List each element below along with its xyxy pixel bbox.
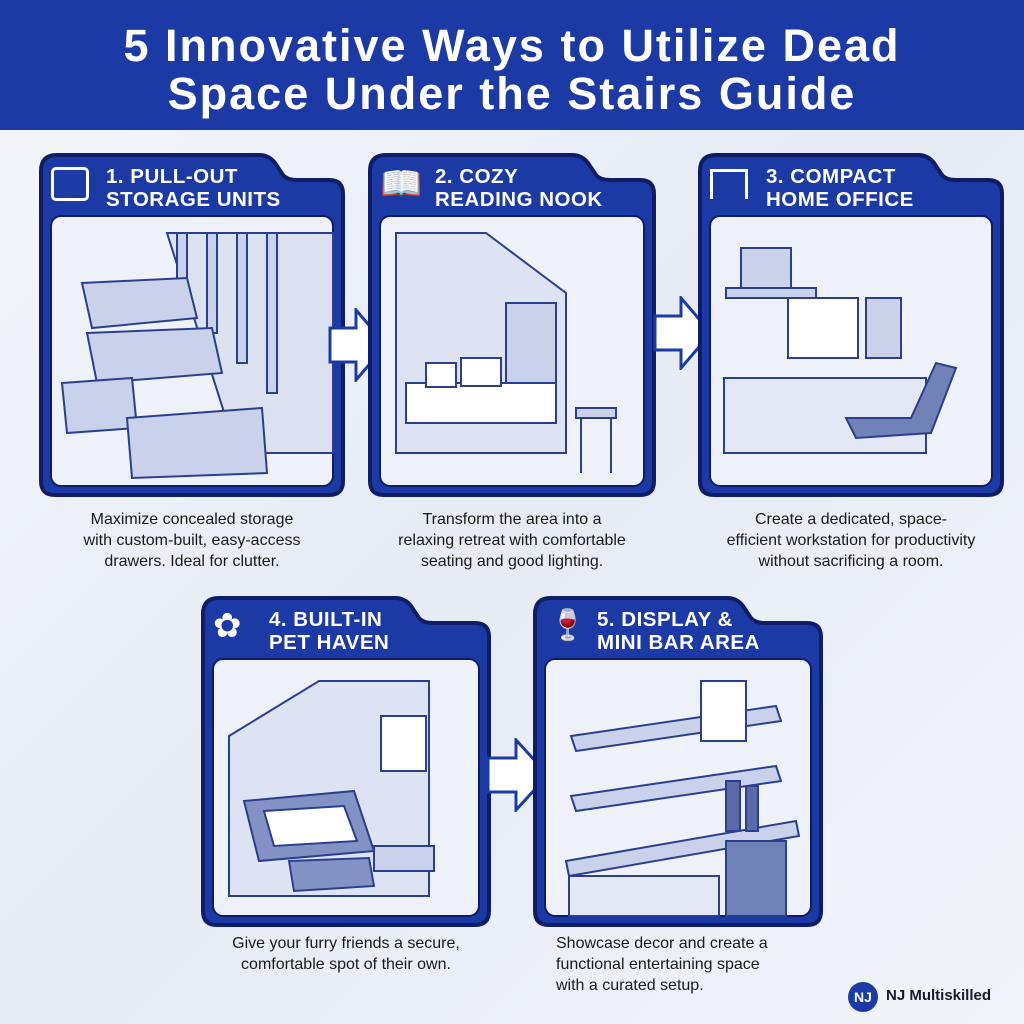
icon: bottle: 🍷: [549, 609, 586, 642]
panel: pet haven: [201, 596, 491, 927]
heading: [269, 608, 389, 654]
caption 1: with custom-built, easy-access: [84, 532, 300, 549]
title: 5 Innovative Ways to Utilize Dead: [123, 20, 900, 71]
arrow 3: [487, 738, 533, 812]
heading: HOME OFFICE: [766, 188, 914, 211]
caption 5: Showcase decor and create a: [556, 935, 768, 952]
caption 3: Create a dedicated, space-: [755, 511, 947, 528]
logo: NJ: [854, 989, 872, 1005]
heading: [106, 165, 281, 211]
arrow 1: [328, 308, 368, 382]
logo: NJ Multiskilled: [886, 987, 991, 1004]
panel: home office: [698, 153, 1004, 497]
panel: pull-out storage: [39, 153, 345, 497]
heading: 3. COMPACT: [766, 165, 896, 188]
caption 1: drawers. Ideal for clutter.: [104, 553, 280, 570]
caption 2: relaxing retreat with comfortable: [398, 532, 626, 549]
logo: [848, 982, 991, 1012]
heading: READING NOOK: [435, 188, 603, 211]
caption 5: [556, 935, 768, 994]
heading: [766, 165, 914, 211]
icon: drawer: [51, 167, 89, 201]
title: [0, 0, 1024, 130]
heading: 2. COZY: [435, 165, 518, 188]
caption 4: comfortable spot of their own.: [241, 956, 451, 973]
heading: PET HAVEN: [269, 631, 389, 654]
heading: STORAGE UNITS: [106, 188, 281, 211]
icon: paw: ✿: [213, 607, 242, 645]
heading: [597, 608, 760, 654]
heading: 4. BUILT-IN: [269, 608, 382, 631]
caption 1: Maximize concealed storage: [91, 511, 293, 528]
heading: MINI BAR AREA: [597, 631, 760, 654]
caption 3: [727, 511, 976, 570]
caption 4: [232, 935, 460, 973]
panel: reading nook: [368, 153, 656, 497]
caption 4: Give your furry friends a secure,: [232, 935, 460, 952]
arrow 2: [654, 296, 698, 370]
caption 5: with a curated setup.: [556, 977, 704, 994]
heading: 5. DISPLAY &: [597, 608, 733, 631]
caption 2: seating and good lighting.: [421, 553, 603, 570]
icon: book: 📖: [380, 165, 422, 203]
icon: desk: [710, 169, 748, 199]
caption 5: functional entertaining space: [556, 956, 760, 973]
caption 1: [84, 511, 300, 570]
title: Space Under the Stairs Guide: [168, 68, 856, 119]
caption 2: [398, 511, 626, 570]
panel: mini bar: [533, 596, 823, 927]
caption 2: Transform the area into a: [422, 511, 602, 528]
heading: [435, 165, 603, 211]
heading: 1. PULL-OUT: [106, 165, 238, 188]
caption 3: efficient workstation for productivity: [727, 532, 975, 549]
caption 3: without sacrificing a room.: [759, 553, 943, 570]
